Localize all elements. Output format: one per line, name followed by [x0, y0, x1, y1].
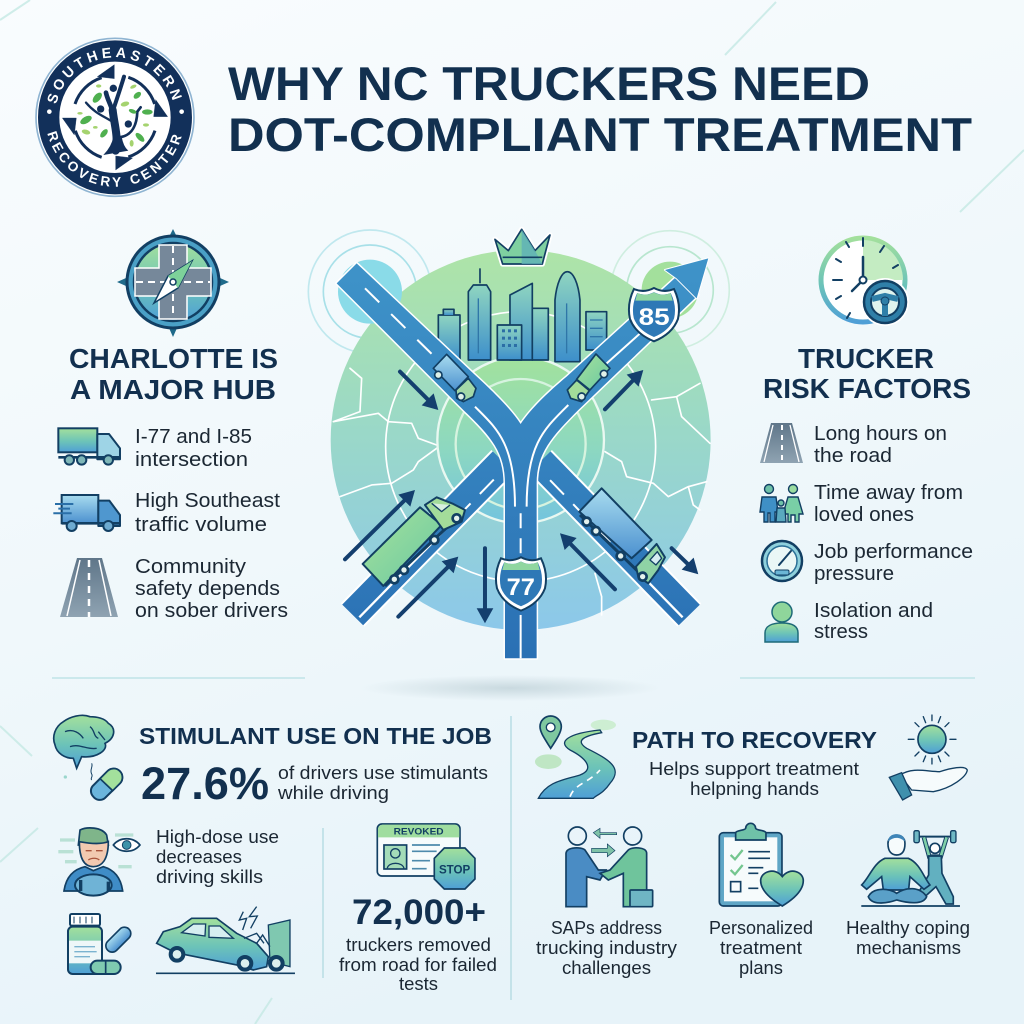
icon: family [760, 484, 803, 522]
text: SAPs: trucking industry [536, 937, 678, 958]
text: high-dose [156, 826, 279, 887]
text: Long hours on [814, 423, 947, 445]
heading: STIMULANT USE ON THE JOB [139, 723, 492, 749]
panel: path to recovery [535, 715, 970, 978]
text: Community safety: Community [135, 556, 246, 578]
text: Time away from [814, 482, 963, 504]
icon: road [60, 558, 118, 617]
truck: small green [567, 354, 610, 402]
text: stat description [277, 762, 488, 803]
text: I-77 and I-85 intersection: intersection [135, 449, 248, 471]
icon: revoked licence and stop sign [377, 824, 475, 889]
skyline [438, 268, 607, 362]
text: High Southeast traffic volume [135, 490, 280, 536]
text: Community safety: safety depends [135, 578, 280, 600]
title: DOT-COMPLIANT TREATMENT [228, 108, 972, 161]
text: SAPs [536, 917, 678, 978]
shield: I-85: 85 [639, 304, 670, 331]
text: helps support [649, 758, 859, 799]
text [814, 541, 973, 585]
text: removed truckers [339, 934, 497, 994]
icon: winding path with pin [535, 716, 616, 798]
icon: yoga and weights [861, 831, 960, 906]
icon: car crash [156, 907, 295, 973]
text: high-dose: decreases [156, 846, 242, 867]
truck: small blue [433, 354, 476, 402]
icon: crown [495, 229, 550, 264]
text: removed truckers: tests [399, 973, 438, 994]
panel: stimulant use on the job [54, 715, 497, 994]
text: personalized [709, 917, 813, 978]
icon: handshake [566, 827, 653, 907]
icon: clipboard with heart [719, 823, 803, 906]
text: healthy coping: Healthy coping [846, 917, 970, 938]
title: WHY NC TRUCKERS NEED [228, 57, 870, 110]
text: Community safety [135, 556, 288, 622]
icon: gauge [762, 541, 802, 581]
road: lower diagonals [353, 462, 689, 617]
icon: revoked licence and stop sign: REVOKED [394, 827, 444, 837]
text: healthy coping: mechanisms [856, 937, 961, 958]
icon: brain [54, 715, 114, 780]
central illustration: interchange map [308, 229, 729, 658]
text: pressure [814, 563, 894, 585]
truck: blue rig [579, 488, 665, 583]
text: stress [814, 621, 868, 643]
text: helps support: Helps support treatment [649, 758, 859, 779]
stat: 27.6%: 27.6% [141, 758, 269, 809]
text: removed truckers: from road for failed [339, 954, 497, 975]
panel: Charlotte is a major hub [53, 229, 288, 622]
icon: sun over hand [889, 715, 967, 800]
text: Isolation and [814, 600, 933, 622]
icon: truck [58, 428, 120, 465]
icon: road [760, 423, 803, 463]
logo: Southeastern Recovery Center: SOUTHEASTERN [48, 48, 182, 104]
icon: revoked licence and stop sign: STOP [439, 862, 470, 876]
shield: I-77: 77 [507, 574, 535, 601]
heading [69, 343, 278, 405]
heading: CHARLOTTE IS [69, 343, 278, 374]
heading: TRUCKER [798, 343, 934, 374]
icon: fast truck [53, 495, 120, 531]
text: stat description: of drivers use stimulants [278, 762, 488, 783]
map disc [331, 250, 711, 630]
panel: trucker risk factors [760, 238, 973, 643]
text: personalized: treatment [720, 937, 802, 958]
text: healthy coping [846, 917, 970, 958]
text: High Southeast traffic volume: High Southeast [135, 490, 280, 512]
text: removed truckers: truckers removed [346, 934, 491, 955]
text: SAPs: SAPs address [551, 917, 662, 938]
heading [763, 343, 971, 404]
text: personalized: Personalized [709, 917, 813, 938]
text: high-dose: driving skills [156, 866, 263, 887]
text: loved ones [814, 504, 914, 526]
text [814, 600, 933, 643]
shield: I-77 [496, 557, 546, 611]
text: SAPs: challenges [562, 957, 651, 978]
text: High Southeast traffic volume: traffic volume [135, 514, 267, 536]
icon: clock with steering wheel [821, 238, 909, 326]
text: high-dose: High-dose use [156, 826, 279, 847]
text: the road [814, 445, 892, 467]
icon: capsule [91, 769, 122, 800]
text: personalized: plans [739, 957, 783, 978]
heading: RISK FACTORS [763, 373, 971, 404]
icon: pill bottle [68, 914, 133, 974]
text: stat description: while driving [277, 782, 389, 803]
pulse rings [308, 230, 729, 353]
icon: person [765, 602, 798, 642]
direction arrows [345, 370, 698, 623]
road: I-77 / I-85 merge [337, 258, 708, 658]
truck: green rig [363, 497, 465, 586]
text [814, 482, 963, 526]
heading: PATH TO RECOVERY [632, 727, 877, 753]
text: I-77 and I-85 intersection [135, 426, 252, 471]
text [814, 423, 947, 467]
text: Community safety: on sober drivers [135, 600, 288, 622]
heading: A MAJOR HUB [70, 374, 276, 405]
text: I-77 and I-85 intersection: I-77 and I-85 [135, 426, 252, 448]
stat: 72,000+: 72,000+ [352, 893, 486, 932]
text: Job performance [814, 541, 973, 563]
icon: compass over road crossing [117, 229, 229, 337]
shield: I-85 [629, 288, 679, 341]
title [228, 57, 972, 161]
text: helps support: helpning hands [690, 778, 819, 799]
logo: Southeastern Recovery Center [35, 38, 195, 198]
logo: Southeastern Recovery Center: RECOVERY CENTER [47, 131, 182, 187]
icon: tired driver [58, 828, 140, 896]
